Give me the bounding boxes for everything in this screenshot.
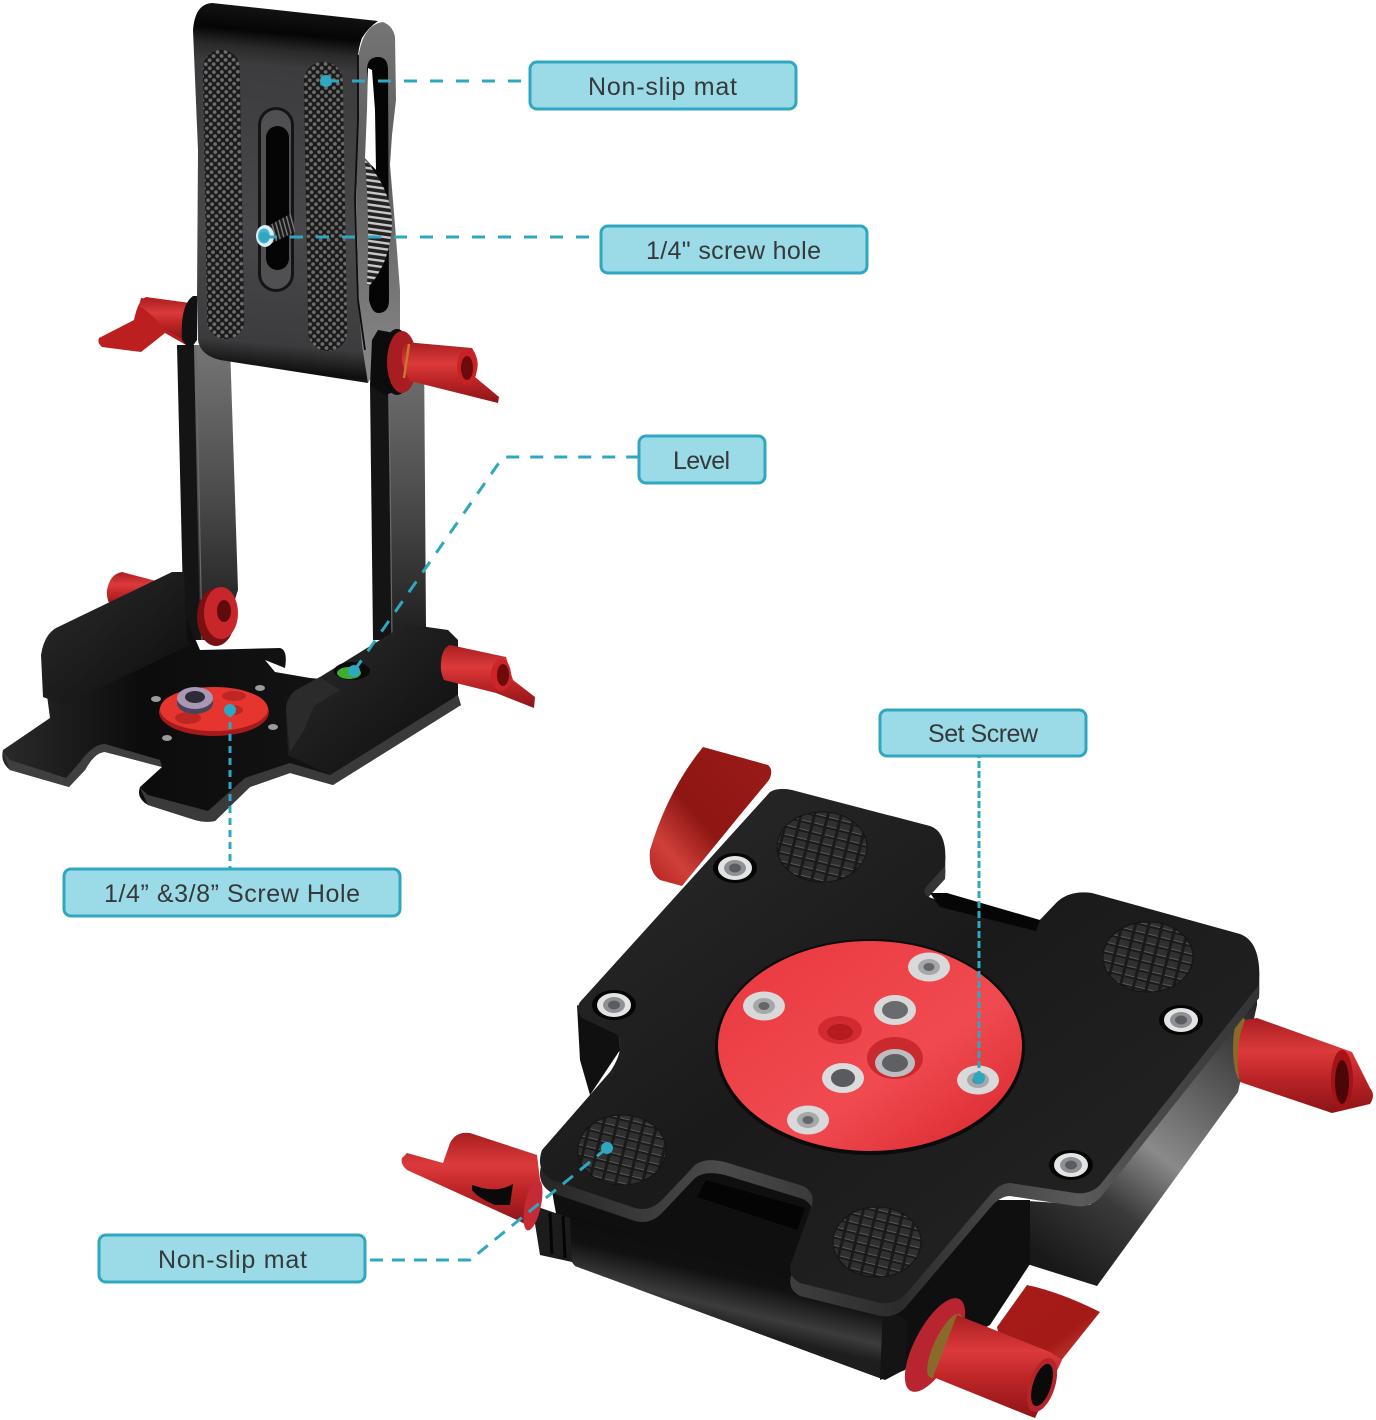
left red wing knob [402,1133,540,1225]
label: level: Level [673,447,730,475]
red pivot bolt [197,587,238,646]
label: 1/4 screw hole: 1/4" screw hole [646,237,821,265]
leader: centre screw hole [224,704,236,869]
base plate [2,620,461,822]
label: set screw: Set Screw [928,720,1039,748]
plate lip [540,802,1259,1316]
label: non-slip mat lower [99,1235,365,1282]
left support leg [177,345,238,640]
leader: set screw [973,756,985,1084]
level vial [334,662,370,680]
hinge barrel [565,1215,890,1380]
label: 1/4 screw hole [601,226,867,273]
edge screws [592,853,1203,1180]
label: level [639,436,765,483]
light showing through the slot [365,68,376,170]
label: set screw [880,710,1086,756]
right red knob [1233,1016,1373,1113]
disc face [718,941,1022,1151]
threaded 1/4 screw [256,213,295,247]
bottom red knob [893,1285,1100,1418]
bracket: folded view [402,747,1373,1418]
edge line of plate side [355,55,365,350]
right side wall [1013,992,1257,1286]
lower hinge body [552,1150,1030,1380]
leader: level [348,457,639,677]
left wing knob [98,296,197,352]
centre slot with bevel [258,107,294,292]
leader: screw hole [259,232,601,242]
left rail block [41,572,190,705]
front slot [697,1180,805,1230]
right wing knob [441,645,535,708]
leader: non-slip mat upper [320,75,530,87]
hinge rings left [520,1178,572,1262]
disc screws [743,952,999,1134]
plate top surface [540,789,1259,1303]
red centre disc [159,687,269,736]
leader: non-slip mat lower [365,1142,613,1260]
rear red knob behind base [107,572,160,608]
rear plate side face [356,22,400,383]
brass insert [177,687,213,714]
label: non-slip mat: Non-slip mat [588,73,737,101]
bracket: upright view [2,3,535,822]
top plate front face [193,3,378,383]
non-slip pad right [303,62,348,351]
label: 1/4 and 3/8 screw hole [64,869,400,916]
right barrel knob [370,329,499,403]
lower left side wall [577,1005,620,1095]
right rail block [286,624,458,775]
label: non-slip mat [530,62,796,109]
base mounting screws [151,685,278,741]
non-slip pad left [202,50,245,339]
non-slip feet [578,812,1193,1277]
knurled adjustment wheel [365,160,392,285]
label: non-slip mat lower: Non-slip mat [158,1246,307,1274]
top red wing knob [650,747,771,886]
side slot [367,57,389,313]
right support leg [370,345,426,650]
label: 1/4 and 3/8 screw hole: 1/4” &3/8” Screw Hole [104,880,360,908]
rear slot [930,893,1040,931]
hinge rings right [880,1305,908,1380]
threaded holes [818,995,923,1093]
red mounting disc [715,939,1025,1155]
